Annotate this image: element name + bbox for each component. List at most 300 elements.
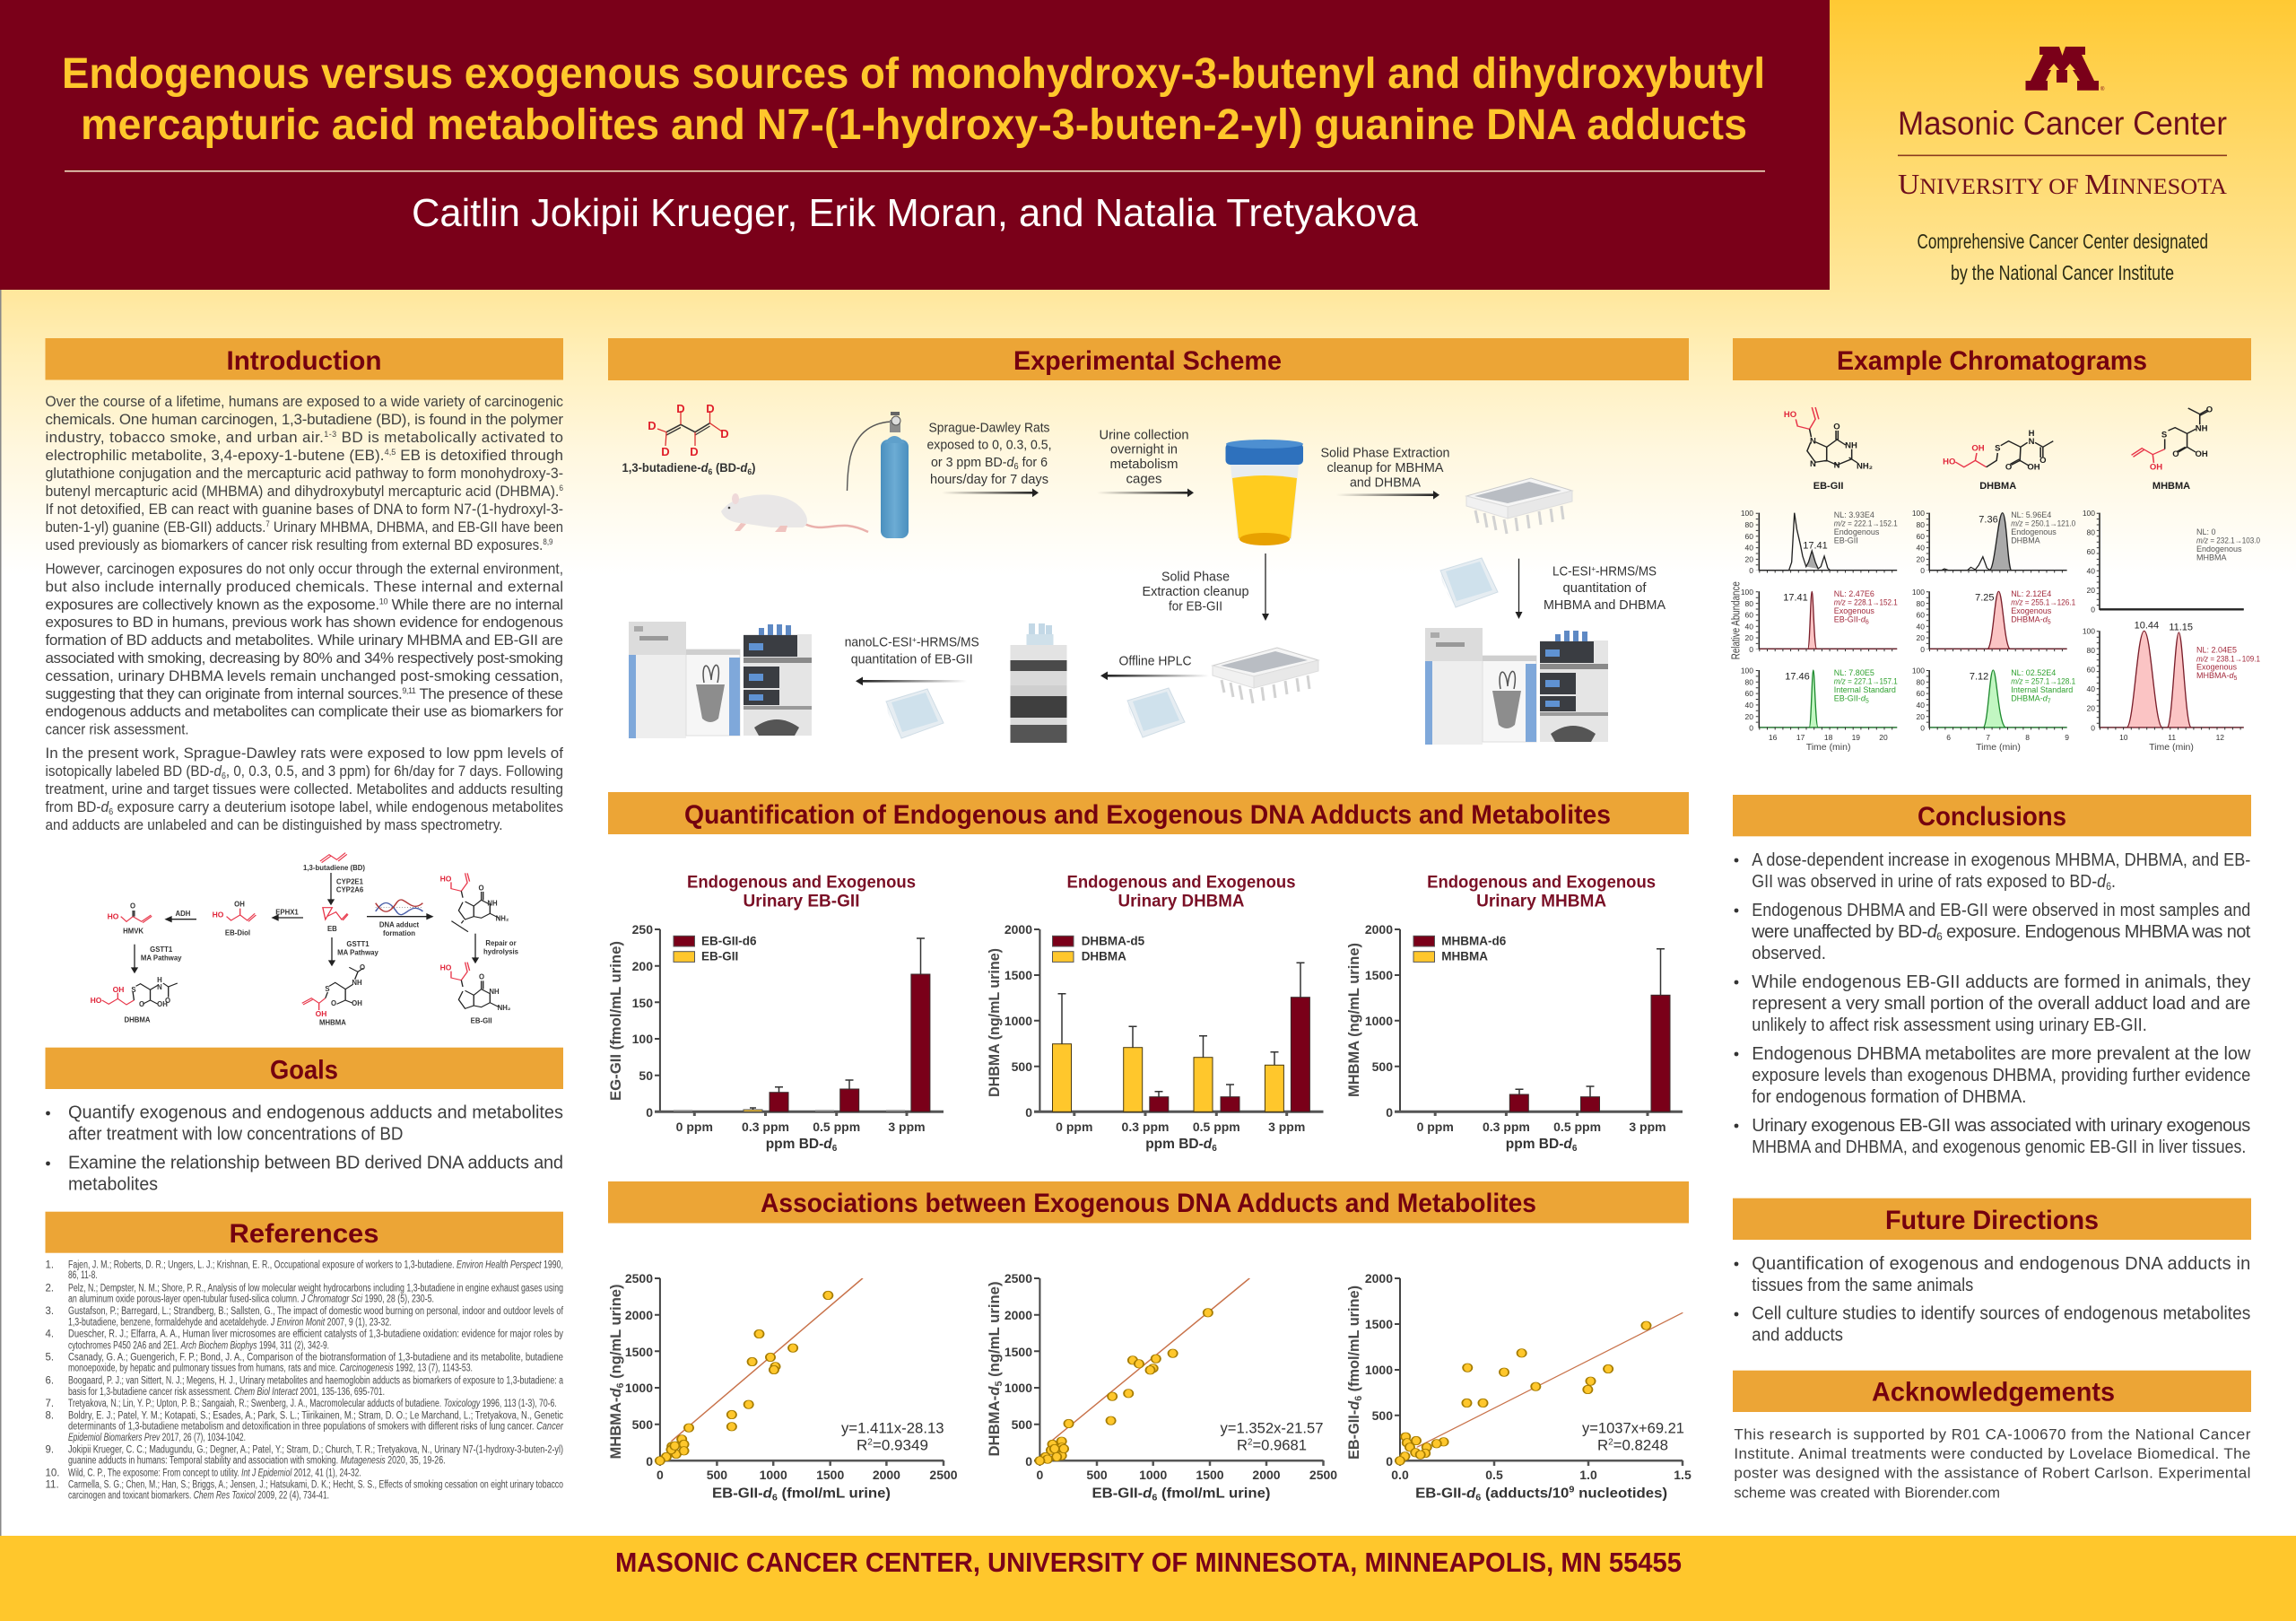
chart: chromatogram annotations: Endogenous <box>2196 545 2242 553</box>
text: rat exposure <box>927 421 1051 487</box>
panel: quantification <box>607 792 1689 1154</box>
icon: molecules <box>1784 405 2213 492</box>
chart: chromatogram axes and labels: 0 <box>1749 566 1753 575</box>
scatter plot: genomic EB-GII vs urinary EB-GII: 1500 <box>1365 1317 1393 1331</box>
text: rat exposure: exposed to 0, 0.3, 0.5, <box>927 438 1051 453</box>
intro paragraph 2: associated with smoking, decreasing by 80% and 34% respectively post-smoking <box>45 649 563 667</box>
chart: chromatogram annotations: m/z = 222.1→152.1 <box>1834 519 1898 528</box>
bar chart: DHBMA: 0 <box>1025 1105 1032 1120</box>
intro paragraph 2: endogenous adducts and metabolites can complicate their use as biomarkers for <box>45 703 563 720</box>
chart: chromatogram traces <box>1759 513 2244 728</box>
conclusion bullets: 6 <box>1936 930 1943 943</box>
bar chart: EB-GII: EG-GII (fmol/mL urine) <box>607 941 624 1101</box>
chart: chromatogram annotations: NL: 3.93E4 <box>1834 510 1874 519</box>
scatter plot: MHBMA vs EB-GII: 500 <box>707 1468 727 1482</box>
chart: chromatogram annotations: Exogenous <box>2011 606 2052 615</box>
chart: chromatogram axes and labels: 20 <box>2087 586 2095 595</box>
scatter plot: genomic EB-GII vs urinary EB-GII: y=1037x+69.21 <box>1582 1419 1684 1436</box>
text: LC quantitation <box>1544 563 1665 613</box>
icon: deuterated butadiene molecule: 6 <box>709 467 712 476</box>
chart: BD metabolic pathway: NH₂ <box>498 1004 511 1012</box>
reference list: 3. <box>45 1306 54 1317</box>
intro paragraph 3 <box>45 745 563 833</box>
text: LC quantitation: -HRMS/MS <box>1596 563 1657 579</box>
icon: molecules: NH <box>2196 424 2208 434</box>
reference list: Wild, C. P., The exposome: From concept to utility. Int J Epidemiol 2012, 41 (1), 24-32. <box>68 1468 361 1478</box>
scatter plot: DHBMA vs EB-GII: 1500 <box>1196 1468 1224 1482</box>
intro paragraph 1: 8,9 <box>543 537 553 546</box>
panel: future directions: tissues from the same animals <box>1752 1276 1973 1295</box>
heading: quantification: Quantification of Endogenous and Exogenous DNA Adducts and Metabolites <box>684 800 1611 830</box>
chart: chromatogram annotations: MHBMA <box>2196 553 2226 562</box>
bar chart: DHBMA: DHBMA <box>1082 950 1126 963</box>
bar chart: MHBMA: 500 <box>1372 1059 1393 1074</box>
logo block: by the National Cancer Institute <box>1951 261 2174 284</box>
footer <box>0 1536 2296 1621</box>
chart: BD metabolic pathway: GSTT1 <box>346 940 370 948</box>
text: SPE EB-GII: for EB-GII <box>1169 599 1222 614</box>
scatter plot: MHBMA vs EB-GII: 6 <box>615 1382 626 1388</box>
scatter plot: genomic EB-GII vs urinary EB-GII: 1.5 <box>1674 1468 1692 1482</box>
chart: chromatogram axes and labels: 0 <box>1749 645 1753 654</box>
scatter plot: MHBMA vs EB-GII: 2000 <box>873 1468 900 1482</box>
chart: chromatogram axes and labels: 100 <box>1912 588 1925 597</box>
bar chart: EB-GII: ppm BD-d <box>766 1137 832 1152</box>
intro paragraph 1: If not detoxified, EB can react with guanine bases of DNA to form N7-(1-hydroxyl-3- <box>45 501 563 518</box>
icon: molecules: N <box>1810 436 1816 446</box>
bar chart: MHBMA: 2000 <box>1365 922 1393 937</box>
icon: molecules: S <box>2161 430 2167 440</box>
scatter plot: genomic EB-GII vs urinary EB-GII: 1000 <box>1365 1363 1393 1377</box>
chart: chromatogram annotations: NL: 0 <box>2196 527 2216 536</box>
icon: instrument right <box>1425 628 1608 745</box>
chart: BD metabolic pathway: Repair or <box>485 939 517 947</box>
chart: chromatogram axes and labels: 6 <box>1946 733 1951 742</box>
chart: chromatogram axes and labels: Time (min) <box>1806 742 1850 753</box>
arrow <box>942 488 1039 497</box>
chart: chromatogram annotations <box>1834 510 2260 704</box>
scatter plot: DHBMA vs EB-GII: 2 <box>1248 1438 1253 1448</box>
chart: BD metabolic pathway: OH <box>234 901 245 909</box>
scatter plot: genomic EB-GII vs urinary EB-GII: R <box>1597 1437 1608 1454</box>
chart: chromatogram annotations: DHBMA-d <box>2011 614 2048 623</box>
chart: BD metabolic pathway: MA Pathway <box>337 948 378 956</box>
chart: BD metabolic pathway: NH <box>487 900 498 908</box>
panel: acknowledgements: Institute. Animal treatments were conducted by Lovelace Biomedical. The <box>1734 1445 2250 1462</box>
intro paragraph 2: While there are no internal <box>387 596 563 613</box>
reference list: cytochromes P450 2A6 and 2E1. Arch Biochem Biophys 1994, 311 (2), 342-9. <box>68 1340 329 1351</box>
text: rat exposure: for 6 <box>1019 455 1048 470</box>
panel: associations <box>607 1181 1692 1503</box>
chart: BD metabolic pathway: O <box>139 1000 144 1008</box>
chart: chromatogram axes and labels: 100 <box>1741 588 1753 597</box>
icon: molecules: MHBMA <box>2152 481 2190 492</box>
intro paragraph 1: 7 <box>265 519 270 528</box>
intro paragraph 1: BD is metabolically activated to <box>336 429 563 446</box>
bar chart: DHBMA: Urinary DHBMA <box>1118 893 1245 911</box>
chart: chromatogram axes and labels: 0 <box>2091 723 2095 732</box>
panel: goals: after treatment with low concentrations of BD <box>68 1125 404 1145</box>
chart: BD metabolic pathway: OH <box>352 999 362 1007</box>
reference list: 86, 11-8. <box>68 1270 98 1281</box>
intro paragraph 2: 10 <box>379 597 387 606</box>
chart: chromatogram axes and labels: 80 <box>1917 678 1925 687</box>
chart: BD metabolic pathway: MA Pathway <box>141 954 182 962</box>
icon: instrument left <box>629 622 812 738</box>
authors: Caitlin Jokipii Krueger, Erik Moran, and Natalia Tretyakova <box>412 191 1419 235</box>
scatter plot: MHBMA vs EB-GII: 0 <box>646 1454 653 1468</box>
icon: microplate left <box>886 689 944 738</box>
heading: acknowledgements: Acknowledgements <box>1872 1378 2115 1407</box>
intro paragraph 3: exposure carry a deuterium isotope label, while endogenous metabolites <box>113 798 563 815</box>
chart: BD metabolic pathway: O <box>479 973 484 981</box>
intro paragraph 1: buten-1-yl) guanine (EB-GII) adducts. <box>45 519 299 536</box>
chart: chromatogram axes and labels: 0 <box>2091 605 2095 614</box>
conclusion bullets: for endogenous formation of DHBMA. <box>1752 1087 2026 1107</box>
intro paragraph 2: The presence of these <box>415 685 563 702</box>
bar chart: EB-GII: Urinary EB-GII <box>743 893 859 911</box>
reference list: Gustafson, P.; Barregard, L.; Strandberg, B.; Sallsten, G., The impact of domestic wood burning on personal, indoor and outdoor levels of <box>68 1306 564 1317</box>
chart: chromatogram annotations: Exogenous <box>2196 663 2238 672</box>
intro paragraph 2: cessation, urinary DHBMA levels remain unchanged post-smoking cessation, <box>45 667 563 684</box>
icon: molecules: OH <box>2150 462 2162 472</box>
bar chart: MHBMA <box>1345 873 1683 1154</box>
chart: chromatogram annotations: Exogenous <box>1834 606 1874 615</box>
bar chart: EB-GII: 0.3 ppm <box>742 1120 789 1134</box>
chart: chromatogram axes and labels: 20 <box>1917 633 1925 642</box>
header banner <box>0 0 1830 290</box>
scatter plot: genomic EB-GII vs urinary EB-GII: 500 <box>1372 1408 1393 1423</box>
chart: chromatogram axes and labels: 17 <box>1796 733 1805 742</box>
reference list: 7. <box>45 1399 54 1409</box>
bar chart: DHBMA <box>986 873 1324 1154</box>
chart: chromatogram axes and labels: 60 <box>1745 689 1753 698</box>
reference list: carcinogen and toxicant biomarkers. Chem Res Toxicol 2009, 22 (4), 734-41. <box>68 1491 329 1502</box>
icon: molecules: N <box>1834 461 1840 471</box>
chart: BD metabolic pathway: S <box>325 985 330 993</box>
chart: BD metabolic pathway: GSTT1 <box>150 946 173 954</box>
text: urine collection: metabolism <box>1110 457 1178 472</box>
chart: BD metabolic pathway: OH <box>113 985 124 994</box>
text: urine collection: Urine collection <box>1100 427 1189 442</box>
icon: deuterated butadiene molecule: 6 <box>747 467 752 476</box>
scatter plot: genomic EB-GII vs urinary EB-GII: 0.5 <box>1485 1468 1503 1482</box>
scatter plot: genomic EB-GII vs urinary EB-GII: EB-GII- d <box>1415 1486 1475 1501</box>
chart: chromatogram axes and labels: 60 <box>1917 689 1925 698</box>
chart: chromatogram annotations: NL: 2.04E5 <box>2196 646 2237 655</box>
reference list: 1,3-butadiene, benzene, formaldehyde and acetaldehyde. J Environ Monit 2007, 9 (1), 23-32. <box>68 1317 391 1328</box>
conclusion bullets: observed. <box>1752 944 1826 963</box>
chart: chromatogram axes and labels: 80 <box>1745 678 1753 687</box>
chart: BD metabolic pathway: 1,3-butadiene (BD) <box>303 864 365 872</box>
chart: chromatogram axes and labels: 0 <box>1749 723 1753 732</box>
icon: molecules: N <box>1810 459 1816 469</box>
text: urine collection <box>1100 427 1189 487</box>
reference list: Tretyakova, N.; Lin, Y. P.; Upton, P. B.; Sangaiah, R.; Swenberg, J. A., Macromolecular adducts of butadiene. Toxicology 1996, 113 (1-3), 70-6. <box>68 1399 557 1409</box>
scatter plot: MHBMA vs EB-GII: 1500 <box>816 1468 844 1482</box>
reference list: 2. <box>45 1283 54 1294</box>
chart: BD metabolic pathway: HO <box>440 963 452 972</box>
chart: chromatogram axes and labels: 80 <box>2087 527 2095 536</box>
scatter plot: DHBMA vs EB-GII: 1000 <box>1139 1468 1167 1482</box>
text: SPE EB-GII: Extraction cleanup <box>1143 584 1248 599</box>
intro paragraph 2: exposures to BD in humans, previous work has shown evidence for endogenous <box>45 614 563 631</box>
icon: gas cylinder <box>847 412 909 538</box>
reference list: 1. <box>45 1259 54 1270</box>
chart: chromatogram annotations: m/z = 250.1→121.0 <box>2011 519 2075 528</box>
scatter plot: DHBMA vs EB-GII: 500 <box>1086 1468 1108 1482</box>
icon: molecules: EB-GII <box>1813 481 1843 492</box>
text: nanoLC: + <box>912 636 917 645</box>
scatter plot: MHBMA vs EB-GII <box>607 1271 958 1503</box>
conclusion bullets: exposure. Endogenous MHBMA was not <box>1942 922 2251 942</box>
chart: chromatogram annotations: EB-GII-d <box>1834 693 1866 702</box>
intro paragraph 2: suggesting that they can originate from internal sources. <box>45 685 403 702</box>
scatter plot: genomic EB-GII vs urinary EB-GII: (fmol/mL urine) <box>1345 1285 1362 1396</box>
intro paragraph 2: exposures are collectively known as the exposome. <box>45 596 379 613</box>
panel: future directions: Quantification of exogenous and endogenous DNA adducts in <box>1752 1254 2250 1274</box>
panel: goals: Quantify exogenous and endogenous adducts and metabolites <box>68 1103 563 1123</box>
bar chart: EB-GII: 6 <box>832 1144 838 1154</box>
icon: microplate right <box>1440 558 1498 607</box>
chart: chromatogram axes and labels: 7.36 <box>1979 514 1998 525</box>
logo block: ® <box>2100 86 2105 92</box>
bar chart: MHBMA: 0 <box>1386 1105 1393 1120</box>
scatter plot: DHBMA vs EB-GII: EB-GII- d <box>1092 1486 1152 1501</box>
scatter plot: MHBMA vs EB-GII: 2500 <box>929 1468 958 1482</box>
chart: chromatogram axes and labels: 20 <box>1917 712 1925 721</box>
chart: chromatogram axes and labels: 20 <box>1745 554 1753 563</box>
text: nanoLC: quantitation of EB-GII <box>851 651 973 667</box>
heading: future directions: Future Directions <box>1885 1206 2099 1235</box>
scatter plot: genomic EB-GII vs urinary EB-GII: 6 <box>1475 1493 1482 1503</box>
conclusion bullets: GII was observed in urine of rats exposed to BD-d <box>1752 872 2139 892</box>
icon: deuterated butadiene molecule <box>622 402 755 476</box>
bar chart: EB-GII: 200 <box>632 959 653 973</box>
chart: chromatogram axes and labels: 40 <box>1917 544 1925 553</box>
panel: experimental scheme <box>608 338 1689 745</box>
chart: chromatogram axes and labels: 17.41 <box>1783 592 1808 603</box>
bar chart: DHBMA: DHBMA (ng/mL urine) <box>986 948 1003 1097</box>
chart: chromatogram annotations: m/z = 257.1→128.1 <box>2011 677 2075 686</box>
icon: deuterated butadiene molecule: D <box>661 445 670 458</box>
scatter plot: genomic EB-GII vs urinary EB-GII: 0 <box>1386 1454 1393 1468</box>
chart: chromatogram axes and labels: 100 <box>2083 509 2095 518</box>
bar chart: MHBMA: 1500 <box>1365 968 1393 982</box>
intro paragraph 2: formation of BD adducts and metabolites. While urinary MHBMA and EB-GII are <box>45 632 563 649</box>
intro paragraph 3: 6 <box>109 807 114 817</box>
bar chart: EB-GII: 0 <box>646 1105 653 1120</box>
conclusion bullets: unlikely to affect risk assessment using urinary EB-GII. <box>1752 1015 2147 1035</box>
text: rat exposure: Sprague-Dawley Rats <box>929 421 1049 436</box>
arrow: LC quantitation <box>1516 559 1523 619</box>
text: LC quantitation: LC-ESI <box>1552 563 1596 579</box>
intro paragraph 2: 9,11 <box>402 686 416 695</box>
scatter plot: MHBMA vs EB-GII: =0.9349 <box>873 1437 928 1454</box>
scatter plot: MHBMA vs EB-GII: 6 <box>772 1493 778 1503</box>
chart: chromatogram axes and labels: 60 <box>1917 610 1925 619</box>
text: urine collection: cages <box>1126 472 1162 487</box>
reference list <box>45 1259 564 1502</box>
conclusion bullets: Endogenous DHBMA and EB-GII were observed in most samples and <box>1752 901 2250 920</box>
chart: chromatogram annotations: DHBMA-d <box>2011 693 2048 702</box>
chart: BD metabolic pathway: O <box>165 997 170 1005</box>
intro paragraph 1: electrophilic metabolite, 3,4-epoxy-1-butene (EB). <box>45 447 385 464</box>
bar chart: DHBMA: 0 ppm <box>1056 1120 1092 1134</box>
chart: chromatogram annotations: DHBMA <box>2011 536 2040 545</box>
bar chart: DHBMA: 0.5 ppm <box>1193 1120 1240 1134</box>
chart: chromatogram annotations: Endogenous <box>1834 527 1880 536</box>
chart: chromatogram axes and labels: 7.25 <box>1975 592 1995 603</box>
panel: future directions: and adducts <box>1752 1326 1843 1346</box>
panel: acknowledgements: poster was designed with the assistance of Robert Carlson. Experimental <box>1734 1465 2250 1482</box>
intro paragraph 3: isotopically labeled BD (BD-d <box>45 763 234 780</box>
scatter plot: DHBMA vs EB-GII: 2500 <box>1004 1271 1032 1285</box>
scatter plot: genomic EB-GII vs urinary EB-GII: 6 <box>1353 1396 1364 1401</box>
scatter plot: genomic EB-GII vs urinary EB-GII: EB-GII-d <box>1345 1400 1362 1460</box>
chart: chromatogram annotations: NL: 02.52E4 <box>2011 668 2056 677</box>
intro paragraph 1: industry, tobacco smoke, and urban air. <box>45 429 324 446</box>
text: urine collection: overnight in <box>1110 441 1178 457</box>
chart: BD metabolic pathway: O <box>360 963 365 972</box>
icon: block M <box>2025 47 2099 91</box>
chart: chromatogram annotations: m/z = 228.1→152.1 <box>1834 598 1898 607</box>
heading: references: References <box>230 1219 378 1249</box>
chart: chromatogram axes and labels: 60 <box>2087 547 2095 556</box>
reference list: 6. <box>45 1375 54 1386</box>
reference list: Boogaard, P. J.; van Sittert, N. J.; Megens, H. J., Urinary metabolites and haemoglobin adducts as biomarkers of exposure to 1,3-butadiene: a <box>68 1375 563 1386</box>
heading: associations: Associations between Exogenous DNA Adducts and Metabolites <box>761 1189 1536 1218</box>
scatter plot: DHBMA vs EB-GII: y=1.352x-21.57 <box>1220 1419 1324 1436</box>
logo block: UNIVERSITY OF MINNESOTA <box>1898 168 2227 200</box>
scatter plot: MHBMA vs EB-GII: 2 <box>867 1438 873 1448</box>
icon: molecules: DHBMA <box>1979 481 2016 492</box>
chart: chromatogram axes and labels: 0 <box>1920 566 1925 575</box>
chart: BD metabolic pathway: HMVK <box>123 927 144 935</box>
intro paragraph 1: butenyl mercapturic acid (MHBMA) and dihydroxybutyl mercapturic acid (DHBMA). <box>45 483 603 500</box>
chart: chromatogram axes and labels: 0 <box>1920 723 1925 732</box>
chart: chromatogram axes and labels: 80 <box>1745 599 1753 608</box>
bar chart: MHBMA: 6 <box>1572 1144 1578 1154</box>
chart: BD metabolic pathway: ADH <box>176 910 191 918</box>
icon: SPE plate centre <box>1213 648 1318 703</box>
arrow <box>1097 488 1194 497</box>
chart: chromatogram axes and labels: 20 <box>1745 633 1753 642</box>
bar chart: EB-GII: EB-GII <box>701 950 738 963</box>
icon: molecules: N <box>2029 437 2035 447</box>
text: SPE MHBMA DHBMA: and DHBMA <box>1350 475 1421 490</box>
bar chart: MHBMA: 0.5 ppm <box>1553 1120 1601 1134</box>
panel: conclusions <box>1733 795 2251 1157</box>
intro paragraph 2 <box>45 560 563 738</box>
chart: BD metabolic pathway: O <box>479 885 484 893</box>
icon: molecules: OH <box>2027 462 2040 472</box>
icon: molecules: NH₂ <box>1857 462 1873 472</box>
conclusion bullets: exposure levels than exogenous DHBMA, providing further evidence <box>1752 1066 2250 1085</box>
scatter plot: DHBMA vs EB-GII: (fmol/mL urine) <box>1157 1486 1270 1501</box>
icon: molecules: S <box>1995 444 2000 454</box>
bar chart: MHBMA: 3 ppm <box>1629 1120 1666 1134</box>
bar chart: DHBMA: DHBMA-d5 <box>1082 934 1145 947</box>
chart: chromatogram axes and labels: 40 <box>1917 701 1925 710</box>
bar chart: MHBMA: Urinary MHBMA <box>1476 893 1606 911</box>
panel: goals: Examine the relationship between BD derived DNA adducts and <box>68 1154 563 1173</box>
conclusion bullets: were unaffected by BD-d <box>1752 922 1937 942</box>
bar chart: EB-GII: 0.5 ppm <box>813 1120 860 1134</box>
scatter plot: DHBMA vs EB-GII: DHBMA-d <box>986 1386 1003 1457</box>
chart: chromatogram axes and labels: Time (min) <box>2149 742 2194 753</box>
intro paragraph 1: chemicals. One human carcinogen, 1,3-butadiene (BD), is found in the polymer <box>45 411 563 428</box>
intro paragraph 2: cancer risk assessment. <box>45 721 188 738</box>
heading: experimental scheme: Experimental Scheme <box>1013 346 1282 376</box>
reference list: 4. <box>45 1329 54 1340</box>
reference list: an aluminum oxide porous-layer open-tubular fused-silica column. J Chromatogr Sci 1990, 28 (5), 230-5. <box>68 1294 434 1305</box>
chart: chromatogram axes and labels: 10 <box>2119 733 2128 742</box>
text: LC quantitation: + <box>1591 564 1596 573</box>
chart: chromatogram annotations: m/z = 232.1→103.0 <box>2196 536 2260 545</box>
chart: chromatogram axes and labels: 40 <box>1917 622 1925 631</box>
arrow: SPE EB-GII <box>1262 553 1269 621</box>
chart: chromatogram axes and labels: 100 <box>1741 666 1753 675</box>
scatter plot: DHBMA vs EB-GII: 0 <box>1025 1454 1032 1468</box>
intro paragraph 1 <box>45 393 563 553</box>
chart: chromatogram axes and labels: 10.44 <box>2135 621 2159 632</box>
scatter plot: MHBMA vs EB-GII: 2000 <box>625 1308 653 1322</box>
chart: BD metabolic pathway: CYP2E1 <box>336 878 364 886</box>
bar chart: DHBMA: 6 <box>1212 1144 1217 1154</box>
icon: deuterated butadiene molecule: d <box>740 461 748 475</box>
chart: chromatogram axes and labels: 8 <box>2025 733 2030 742</box>
chart: BD metabolic pathway: HO <box>108 911 119 920</box>
conclusion bullets: represent a very small portion of the overall adduct load and are <box>1752 994 2250 1014</box>
chart: BD metabolic pathway: hydrolysis <box>483 947 519 955</box>
chart: chromatogram axes and labels <box>1741 509 2244 753</box>
scatter plot: MHBMA vs EB-GII: (fmol/mL urine) <box>778 1486 891 1501</box>
chart: chromatogram axes and labels: 80 <box>1917 520 1925 529</box>
bar chart: DHBMA: 1000 <box>1004 1014 1032 1028</box>
chart: chromatogram axes and labels: 20 <box>1879 733 1888 742</box>
chart: chromatogram annotations: Endogenous <box>2011 527 2057 536</box>
reference list: determinants of 1,3-butadiene metabolism and detoxification in three populations of smokers with different risks of lung cancer. Cancer <box>68 1421 564 1432</box>
intro paragraph 1: EB is detoxified through <box>396 447 563 464</box>
conclusion bullets: . <box>2111 872 2116 892</box>
intro paragraph 3: from BD-d <box>45 798 109 815</box>
chart: chromatogram annotations: EB-GII-d <box>1834 614 1866 623</box>
scatter plot: genomic EB-GII vs urinary EB-GII: (adducts/10 <box>1481 1486 1569 1501</box>
chart: BD metabolic pathway: H <box>157 976 162 984</box>
chart: chromatogram annotations: 5 <box>2048 619 2051 625</box>
bar chart: DHBMA: Endogenous and Exogenous <box>1067 873 1295 892</box>
chart: BD metabolic pathway: formation <box>383 929 415 937</box>
conclusion bullets: Endogenous DHBMA metabolites are more prevalent at the low <box>1752 1044 2251 1064</box>
chart: chromatogram axes and labels: 80 <box>1745 520 1753 529</box>
reference list: Jokipii Krueger, C. C.; Madugundu, G.; Degner, A.; Patel, Y.; Stram, D.; Church, T. R.; Tretyakova, N., Urinary N7-(1-hydroxy-3-buten-2-yl) <box>68 1444 563 1455</box>
chart: chromatogram axes and labels: 0 <box>1920 645 1925 654</box>
scatter plot: MHBMA vs EB-GII: (ng/mL urine) <box>607 1285 624 1382</box>
icon: deuterated butadiene molecule: D <box>706 402 715 415</box>
chart: BD metabolic pathway: NH₂ <box>496 915 509 923</box>
title <box>62 50 1765 149</box>
chart: chromatogram annotations: Internal Standard <box>1834 685 1896 694</box>
text: nanoLC: -HRMS/MS <box>917 635 979 650</box>
chart: chromatogram axes and labels: 40 <box>2087 567 2095 576</box>
scatter plot: DHBMA vs EB-GII: =0.9681 <box>1252 1437 1307 1454</box>
scatter plot: genomic EB-GII vs urinary EB-GII: nucleotides) <box>1574 1486 1667 1501</box>
reference list: Duescher, R. J.; Elfarra, A. A., Human liver microsomes are efficient catalysts of 1,3-butadiene oxidation: evidence for major roles by <box>68 1329 563 1340</box>
scatter plot: MHBMA vs EB-GII: 1000 <box>625 1381 653 1395</box>
intro paragraph 2: but also include internally produced chemicals. These internal and external <box>45 578 563 595</box>
scatter plot: MHBMA vs EB-GII: 1500 <box>625 1345 653 1359</box>
